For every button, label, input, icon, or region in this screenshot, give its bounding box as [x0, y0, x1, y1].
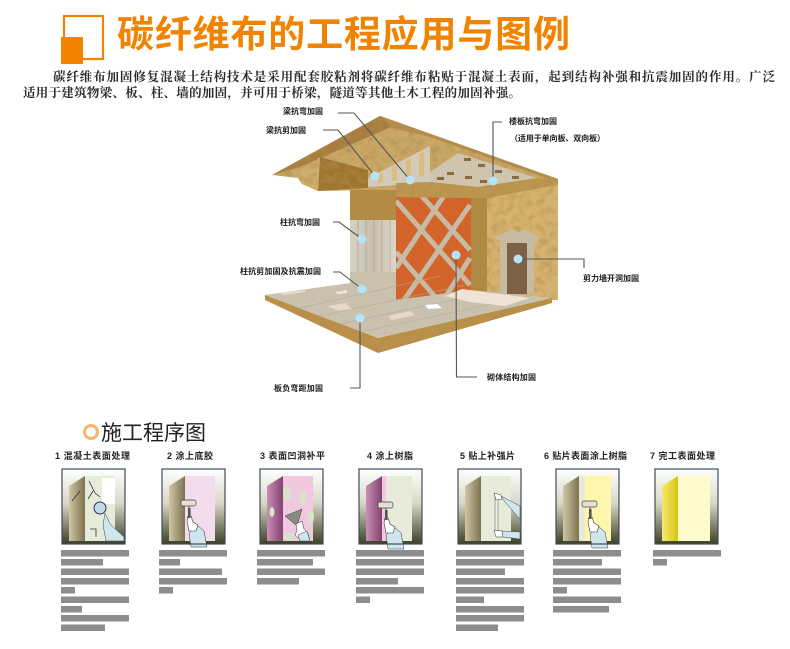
- step 3 illustration: [260, 469, 323, 544]
- brick wall diagonal straps: [396, 194, 470, 300]
- callout: 楼板抗弯加固: [488, 116, 605, 186]
- step 4 description: [356, 550, 424, 603]
- callout: 剪力墙开洞加固: [514, 254, 639, 283]
- callout: 楼板抗弯加固: 楼板抗弯加固: [509, 116, 557, 126]
- ceiling slab mesh: [430, 153, 537, 187]
- step 6: [544, 450, 627, 612]
- callout: 砌体结构加固: [452, 250, 536, 382]
- section icon: ring: [84, 426, 98, 438]
- step 7 illustration: [655, 469, 718, 544]
- callout: 柱抗剪加固及抗震加固: [240, 266, 366, 294]
- roof ridge: [272, 116, 400, 175]
- step 4: 4 涂上树脂: [367, 450, 413, 461]
- step 4: [356, 450, 424, 603]
- floor edge: [265, 295, 552, 353]
- step 3 description: [257, 550, 325, 584]
- step 1 illustration: [62, 469, 125, 544]
- right wall: [470, 179, 558, 300]
- intro paragraph: 适用于建筑物梁、板、柱、墙的加固，并可用于桥梁，隧道等其他土木工程的加固补强。: [23, 85, 521, 100]
- step 4 illustration: [359, 469, 422, 549]
- callout: 砌体结构加固: 砌体结构加固: [487, 372, 536, 382]
- callout: 板负弯距加固: [274, 314, 364, 393]
- callout: 柱抗弯加固: 柱抗弯加固: [280, 217, 320, 227]
- logo mark: [61, 16, 103, 64]
- building cutaway illustration: [240, 106, 639, 393]
- step 6 illustration: [556, 469, 619, 548]
- callout: 梁抗剪加固: [266, 125, 380, 180]
- step 2: [159, 450, 227, 594]
- roof ridge right: [380, 116, 558, 180]
- step 3: 3 表面凹洞补平: [260, 450, 325, 461]
- step 5 description: [456, 550, 524, 631]
- step 7: [650, 450, 721, 566]
- step 5: [456, 450, 524, 631]
- step 5: 5 贴上补强片: [460, 450, 515, 461]
- callout: 梁抗弯加固: 梁抗弯加固: [283, 106, 323, 116]
- roof soffit: [272, 116, 558, 198]
- callout: 板负弯距加固: 板负弯距加固: [274, 383, 323, 393]
- beam side: [318, 157, 368, 191]
- callout: 柱抗弯加固: [280, 217, 366, 244]
- callout: 柱抗剪加固及抗震加固: 柱抗剪加固及抗震加固: [240, 266, 321, 276]
- step 7 description: [653, 550, 721, 566]
- beam reinforcing strips: [368, 146, 430, 187]
- floor slab: [265, 272, 552, 338]
- column top: [350, 190, 396, 221]
- intro paragraph: 碳纤维布加固修复混凝土结构技术是采用配套胶粘剂将碳纤维布粘贴于混凝土表面，起到结构补强和抗震加固的作用。广泛: [53, 69, 775, 84]
- step 6: 6 贴片表面涂上树脂: [544, 450, 627, 461]
- callout: 楼板抗弯加固: （适用于单向板、双向板）: [510, 133, 605, 143]
- step 3: [257, 450, 325, 584]
- step 1 description: [61, 550, 129, 631]
- callout: 梁抗弯加固: [283, 106, 414, 184]
- ceiling beam: [396, 178, 558, 198]
- callout: 剪力墙开洞加固: 剪力墙开洞加固: [583, 273, 639, 283]
- step 2: 2 涂上底胶: [167, 450, 213, 461]
- corner pillar: [470, 195, 487, 293]
- column wrap: [350, 220, 396, 292]
- step 2 illustration: [162, 469, 225, 547]
- title: 碳纤维布的工程应用与图例: [117, 14, 570, 55]
- step 2 description: [159, 550, 227, 594]
- step 1: 1 混凝土表面处理: [55, 450, 130, 461]
- brick wall: [396, 194, 471, 300]
- beam end: [302, 157, 320, 191]
- section heading: 施工程序图: [101, 422, 206, 445]
- step 6 description: [553, 550, 621, 612]
- callout: 梁抗剪加固: 梁抗剪加固: [266, 125, 306, 135]
- door opening: [494, 229, 540, 294]
- intro paragraph: [23, 69, 775, 100]
- step 5 illustration: [458, 469, 521, 544]
- step 7: 7 完工表面处理: [650, 450, 715, 461]
- step 1: [55, 450, 130, 631]
